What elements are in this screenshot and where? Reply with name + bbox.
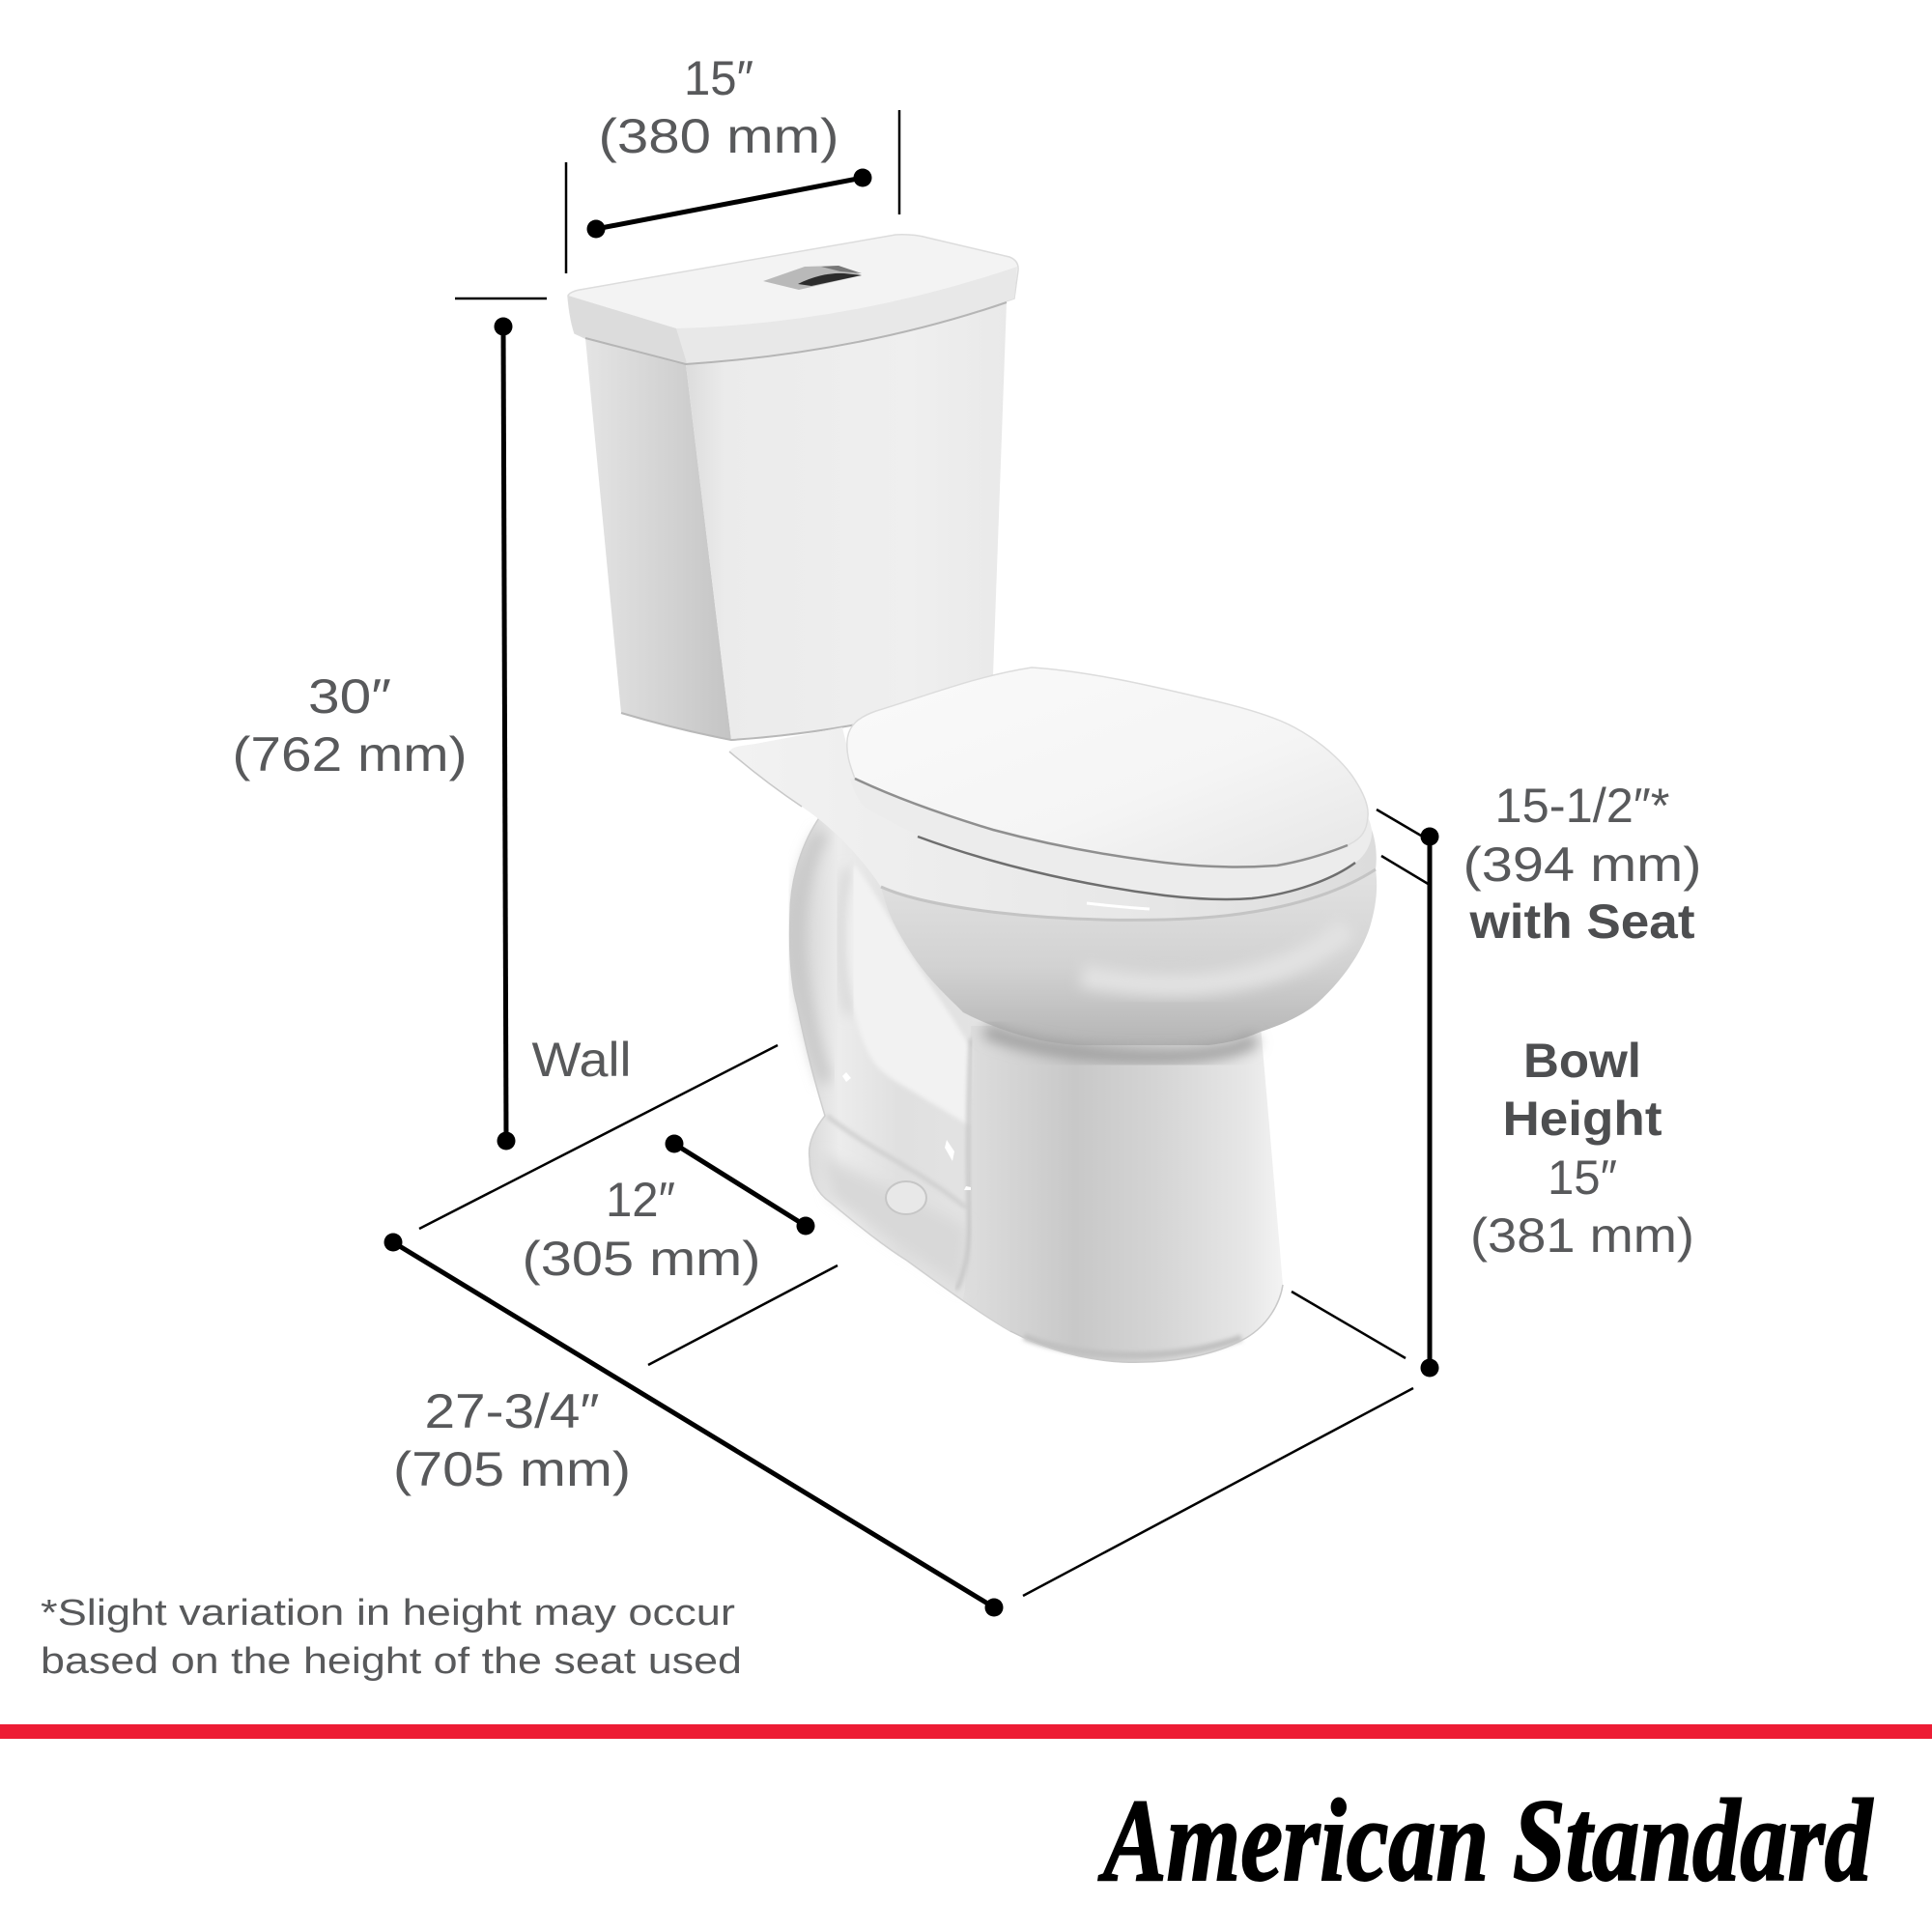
label: bowl height: 15″ [1548, 1151, 1617, 1205]
label: total height: (762 mm) [232, 727, 468, 781]
seat lid [847, 668, 1368, 867]
label: total depth: (705 mm) [393, 1442, 631, 1496]
toilet bowl base [790, 816, 1283, 1362]
pedestal [963, 1026, 1283, 1362]
toilet bowl and rim [729, 727, 1377, 1057]
highlights [842, 1072, 971, 1190]
red divider bar [0, 1724, 1932, 1739]
rim [729, 727, 1377, 920]
label: height with seat: with Seat [1468, 895, 1695, 949]
toilet seat [847, 668, 1372, 899]
flush button [763, 266, 862, 290]
label: height with seat: 15-1/2″* [1495, 779, 1669, 833]
footnote: *Slight variation in height may occur [41, 1593, 735, 1634]
label: rough-in: (305 mm) [522, 1232, 761, 1286]
label: bowl height: (381 mm) [1470, 1208, 1694, 1263]
dimension: bowl height line [1377, 810, 1439, 1378]
base ridge [827, 1116, 966, 1208]
toilet tank [568, 235, 1018, 740]
label: total depth: 27-3/4″ [425, 1384, 599, 1438]
label: total height [232, 669, 468, 781]
toilet illustration [568, 235, 1377, 1362]
label: bowl height: Height [1503, 1092, 1662, 1146]
tank lid [568, 235, 1018, 363]
label: bowl height: Bowl [1523, 1034, 1641, 1088]
footnote: based on the height of the seat used [41, 1641, 742, 1682]
dimension: total height line [455, 298, 547, 1150]
label: rough-in: 12″ [606, 1173, 675, 1227]
bolt cap [886, 1181, 926, 1214]
label: tank width: 15″ [684, 51, 753, 105]
label: bowl height [1470, 1034, 1694, 1263]
label: total height: 30″ [308, 669, 391, 724]
footnote [41, 1593, 742, 1682]
shadow under bowl [985, 1030, 1256, 1057]
label: rough-in [522, 1173, 761, 1286]
label: tank width: (380 mm) [599, 109, 838, 163]
dimension: tank width line [566, 110, 899, 273]
label: wall: Wall [531, 1033, 632, 1087]
label: height with seat: (394 mm) [1463, 838, 1702, 892]
label: total depth [393, 1384, 631, 1496]
trapway recess [844, 865, 971, 1125]
dimension: total depth line [384, 1233, 1413, 1617]
label: height with seat [1463, 779, 1702, 949]
label: tank width [599, 51, 838, 163]
dimension: rough-in line [419, 1045, 838, 1365]
